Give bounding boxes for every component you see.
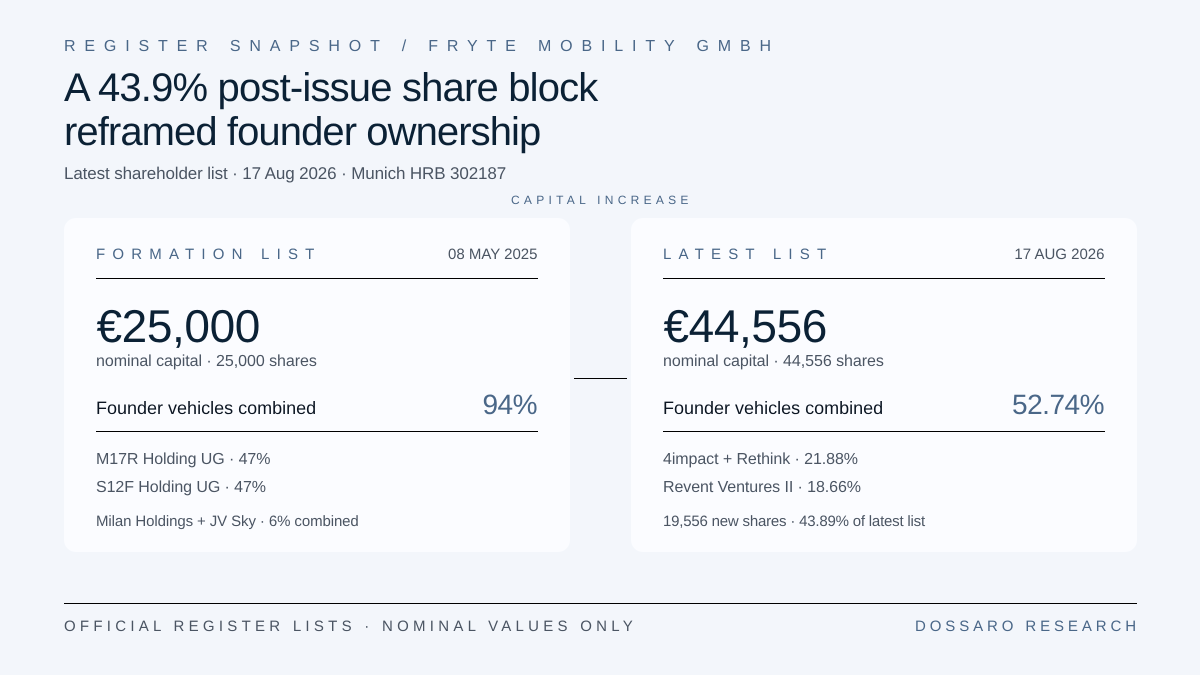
nominal capital note: nominal capital · 44,556 shares [663,353,884,370]
eyebrow: REGISTER SNAPSHOT / FRYTE MOBILITY GMBH [64,38,780,55]
panel: formation list [64,218,570,552]
panel: latest list [631,218,1137,552]
other holders: Milan Holdings + JV Sky · 6% combined [96,513,359,530]
founder label: Founder vehicles combined [96,398,316,418]
panel label: FORMATION LIST [96,246,322,263]
new shares note: 19,556 new shares · 43.89% of latest list [663,513,925,530]
title [64,66,598,154]
nominal capital note: nominal capital · 25,000 shares [96,353,317,370]
founder percentage: 52.74% [1012,389,1104,420]
founder percentage: 94% [482,389,537,420]
footer brand: DOSSARO RESEARCH [915,618,1140,635]
panel date: 08 MAY 2025 [448,246,538,263]
title: reframed founder ownership [64,110,540,154]
footer source: OFFICIAL REGISTER LISTS · NOMINAL VALUES ONLY [64,618,637,635]
arrow: connector line [574,378,627,379]
panel date: 17 AUG 2026 [1014,246,1104,263]
nominal capital figure: €44,556 [664,300,827,352]
subtitle: Latest shareholder list · 17 Aug 2026 · Munich HRB 302187 [64,164,506,183]
title: A 43.9% post-issue share block [64,66,598,110]
connector label: CAPITAL INCREASE [511,193,693,207]
holder 2: Revent Ventures II · 18.66% [663,479,861,496]
holder 2: S12F Holding UG · 47% [96,479,266,496]
founder label: Founder vehicles combined [663,398,883,418]
nominal capital figure: €25,000 [96,300,260,352]
panel label: LATEST LIST [663,246,833,263]
holder 1: M17R Holding UG · 47% [96,451,270,468]
holder 1: 4impact + Rethink · 21.88% [663,451,858,468]
